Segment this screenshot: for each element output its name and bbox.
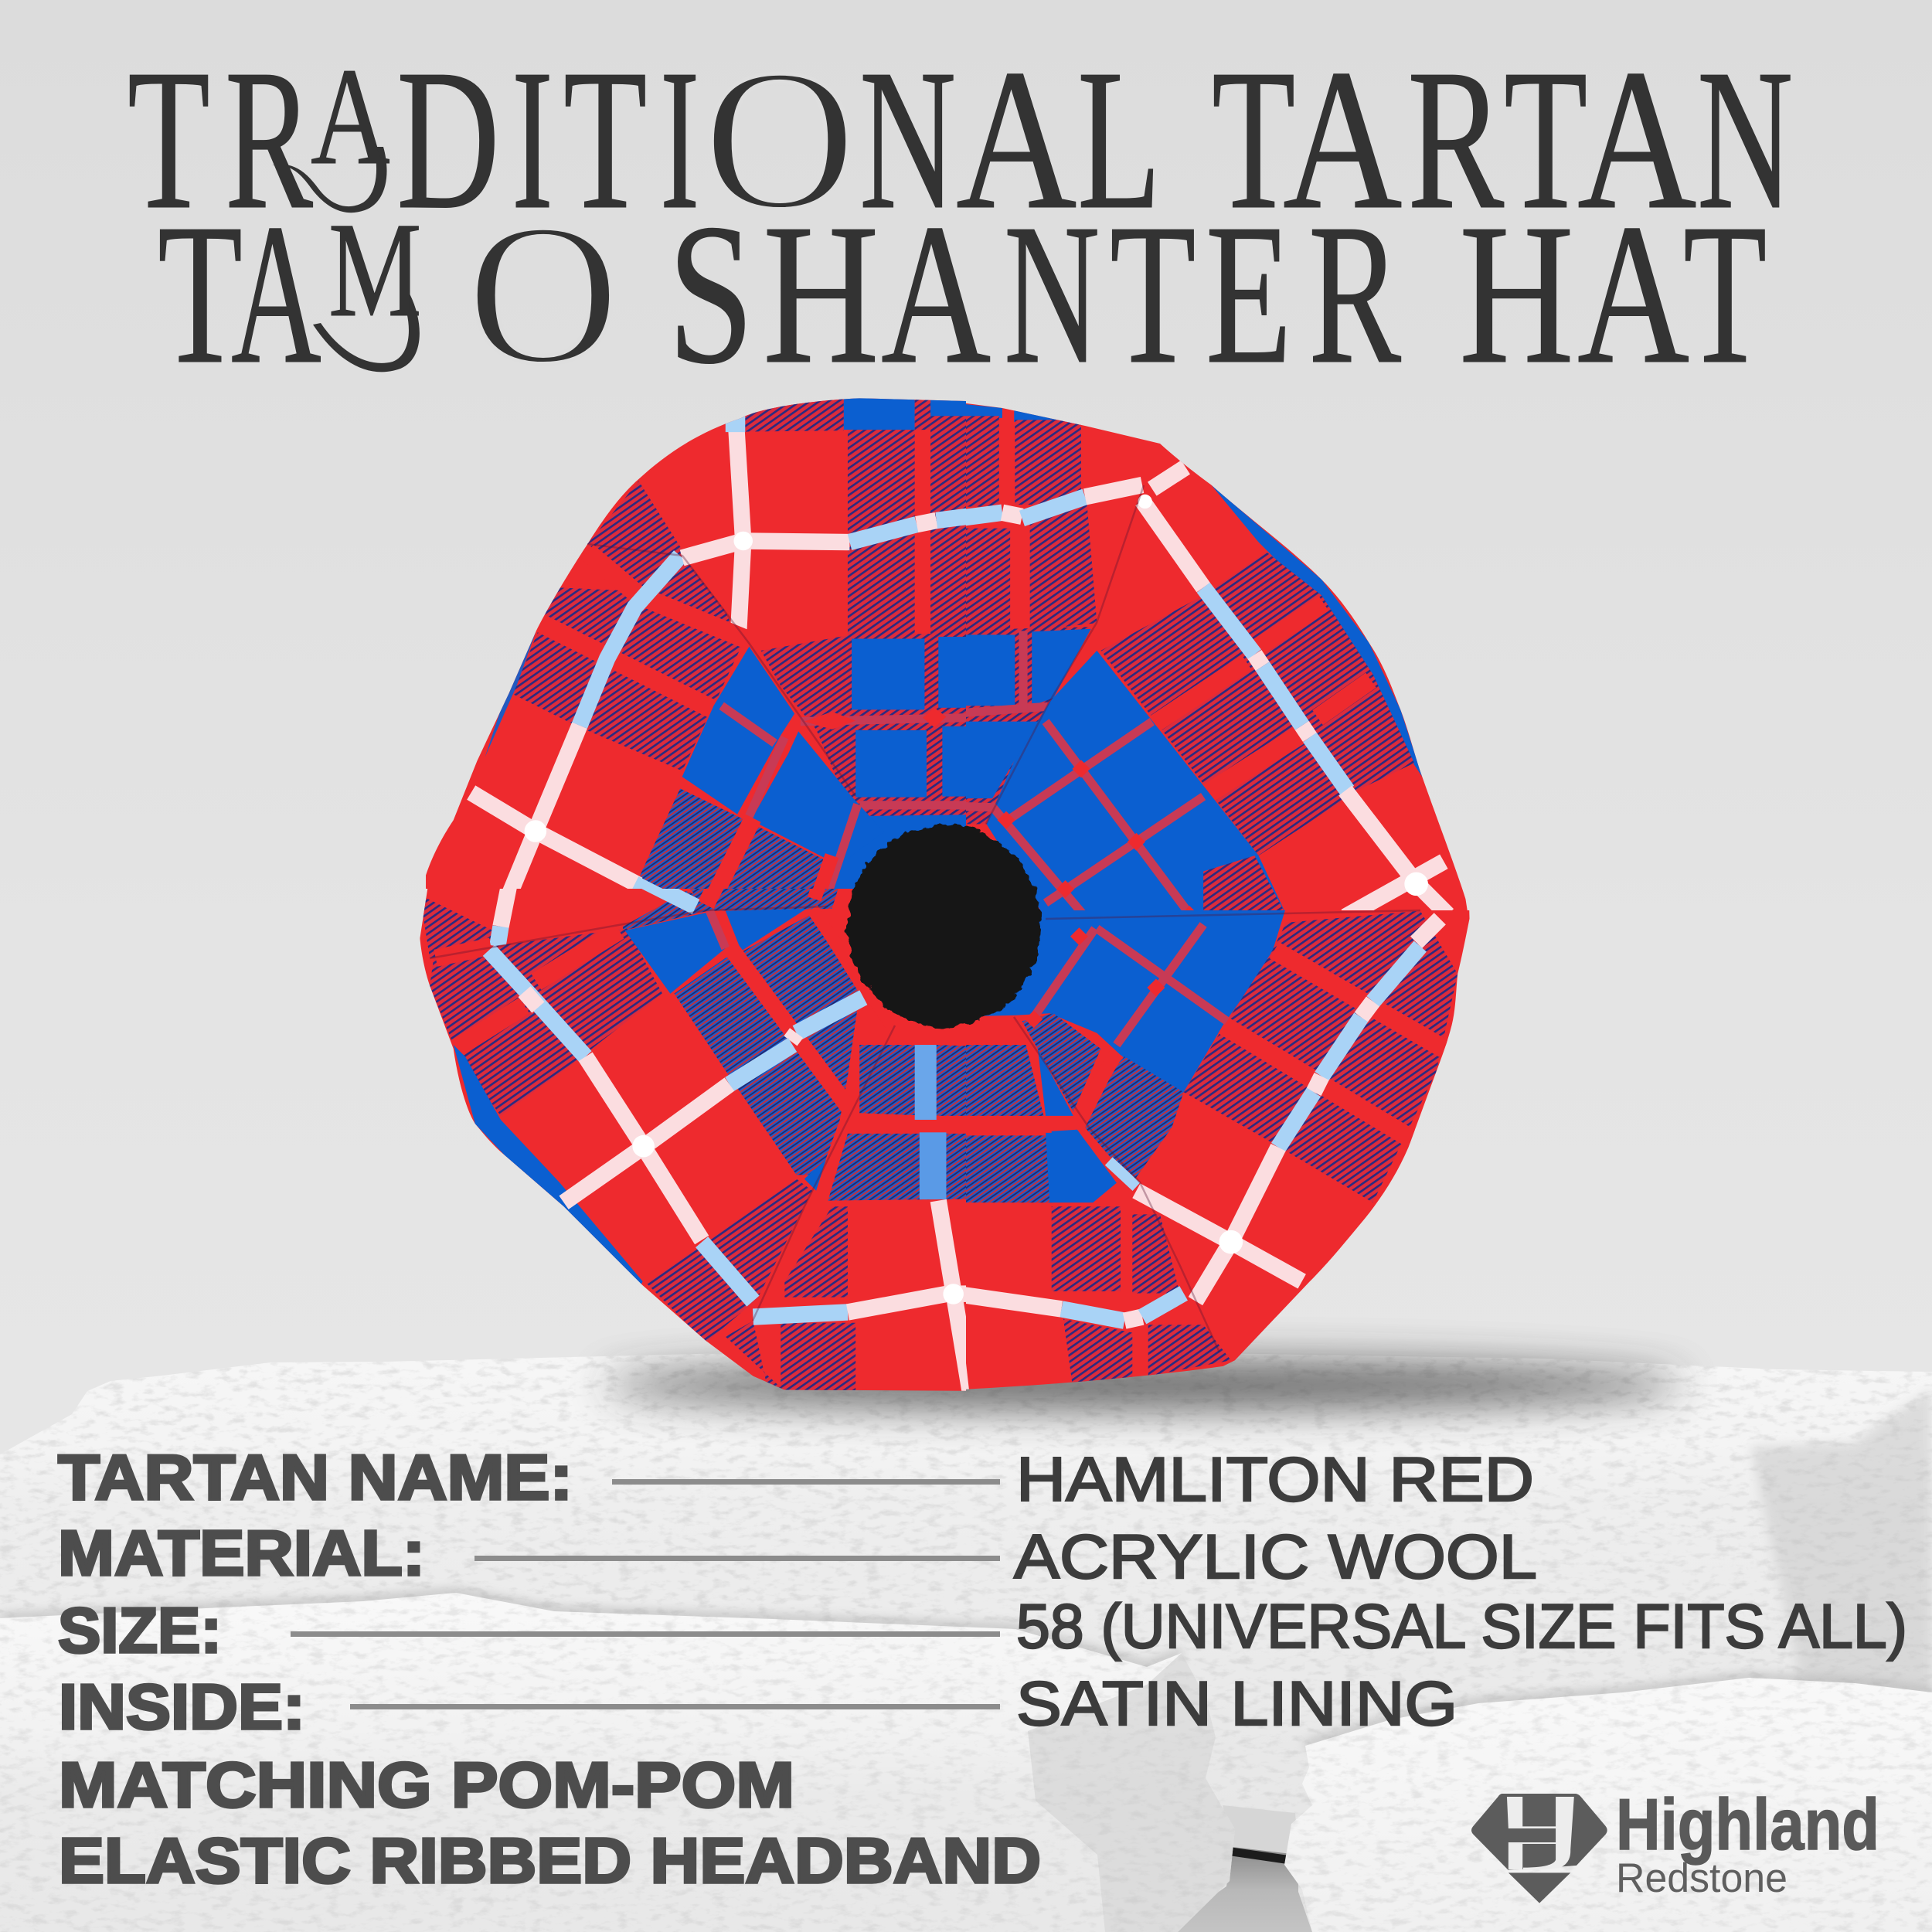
title: L	[1077, 28, 1161, 251]
logo mark	[1471, 1794, 1607, 1903]
title: O	[703, 28, 856, 251]
rock: back slab texture	[0, 1345, 1932, 1932]
title: A	[1577, 182, 1689, 406]
logo	[1471, 1784, 1879, 1903]
hat shadow	[603, 1360, 1685, 1410]
label: inside: INSIDE:	[59, 1671, 305, 1743]
title: O	[467, 182, 620, 406]
upper left panel corner	[423, 889, 838, 958]
title: M	[328, 195, 422, 345]
title: A	[881, 182, 991, 406]
title: R	[1308, 182, 1401, 406]
top panel plaid	[966, 404, 1144, 824]
rock: floor gap	[1161, 1839, 1312, 1932]
lower right panel plaid	[927, 906, 1458, 1301]
line: tartan name	[612, 1479, 1000, 1485]
title: T	[1110, 182, 1196, 406]
lower left panel plaid	[430, 909, 891, 1342]
feature: pom-pom: MATCHING POM-POM	[59, 1749, 794, 1821]
label: material: MATERIAL:	[58, 1517, 425, 1589]
line: inside	[350, 1704, 1000, 1709]
title: T	[1212, 28, 1295, 251]
title: N	[1697, 28, 1793, 251]
rock: right block	[1284, 1678, 1932, 1932]
hat: upper left quadrant	[426, 398, 966, 889]
value: size: 58 (UNIVERSAL SIZE FITS ALL)	[1016, 1592, 1907, 1662]
title: A	[956, 28, 1077, 251]
title: R	[225, 28, 313, 251]
hat: lower left quadrant	[420, 889, 966, 1391]
label: size: SIZE:	[58, 1594, 222, 1666]
spec lines	[291, 1479, 1000, 1709]
value: material: ACRYLIC WOOL	[1014, 1522, 1537, 1592]
upper right panel plaid	[987, 468, 1447, 923]
title: A	[1283, 28, 1403, 251]
title: T	[1683, 182, 1767, 406]
rock: front left block	[0, 1593, 1235, 1932]
logo wordmark: Highland: Highland	[1616, 1784, 1879, 1865]
hat: upper right quadrant	[966, 403, 1468, 910]
hat: lower right quadrant	[927, 773, 1546, 1391]
title: I	[660, 28, 699, 251]
top panel white line	[682, 541, 849, 558]
stone pedestal	[0, 1345, 1932, 1932]
title: I	[512, 28, 553, 251]
title: T	[563, 28, 647, 251]
title: E	[1206, 182, 1292, 406]
value: inside: SATIN LINING	[1016, 1669, 1458, 1739]
swash: TAM ligature	[313, 294, 420, 372]
rock: back slab	[0, 1352, 1932, 1932]
tartan hat	[386, 386, 1546, 1392]
rock: front block side shade	[1028, 1653, 1235, 1932]
title: N	[859, 28, 956, 251]
feature: headband: ELASTIC RIBBED HEADBAND	[59, 1825, 1041, 1896]
blue underside	[1211, 485, 1422, 777]
title: D	[396, 28, 500, 251]
title: T	[128, 28, 210, 251]
title: A	[231, 182, 321, 406]
line: material	[474, 1556, 1000, 1561]
spec values	[1014, 1445, 1907, 1739]
rock: lip underside	[1223, 1805, 1298, 1855]
title: H	[763, 182, 879, 406]
title: H	[1459, 182, 1574, 406]
title swashes	[272, 147, 420, 372]
check dots	[733, 532, 753, 550]
bottom panel plaid right	[927, 1037, 1231, 1391]
title: T	[158, 182, 243, 406]
title: T	[1504, 28, 1587, 251]
rock: gap shadow	[1229, 1847, 1289, 1864]
rock: front blocks texture	[0, 1593, 1932, 1932]
title: A	[1577, 28, 1697, 251]
title	[128, 28, 1793, 406]
top panel checks	[725, 398, 966, 889]
label: tartan name: TARTAN NAME:	[58, 1441, 573, 1513]
title: S	[668, 182, 754, 406]
title: R	[1407, 28, 1504, 251]
bottom panel plaid	[726, 1045, 966, 1391]
hat: panel seams	[430, 485, 1420, 1352]
line: size	[291, 1631, 1000, 1637]
title: N	[1004, 182, 1100, 406]
spec labels	[58, 1441, 1041, 1896]
title: A	[311, 39, 390, 193]
upper left panel plaid	[471, 481, 884, 915]
rock: contact shadow	[0, 1593, 1932, 1746]
swash: TRA ligature	[272, 147, 387, 213]
logo wordmark: Redstone: Redstone	[1616, 1855, 1787, 1901]
black pom-pom	[848, 825, 1041, 1027]
rock: right side facet	[1750, 1389, 1932, 1692]
value: tartan name: HAMLITON RED	[1016, 1445, 1534, 1515]
